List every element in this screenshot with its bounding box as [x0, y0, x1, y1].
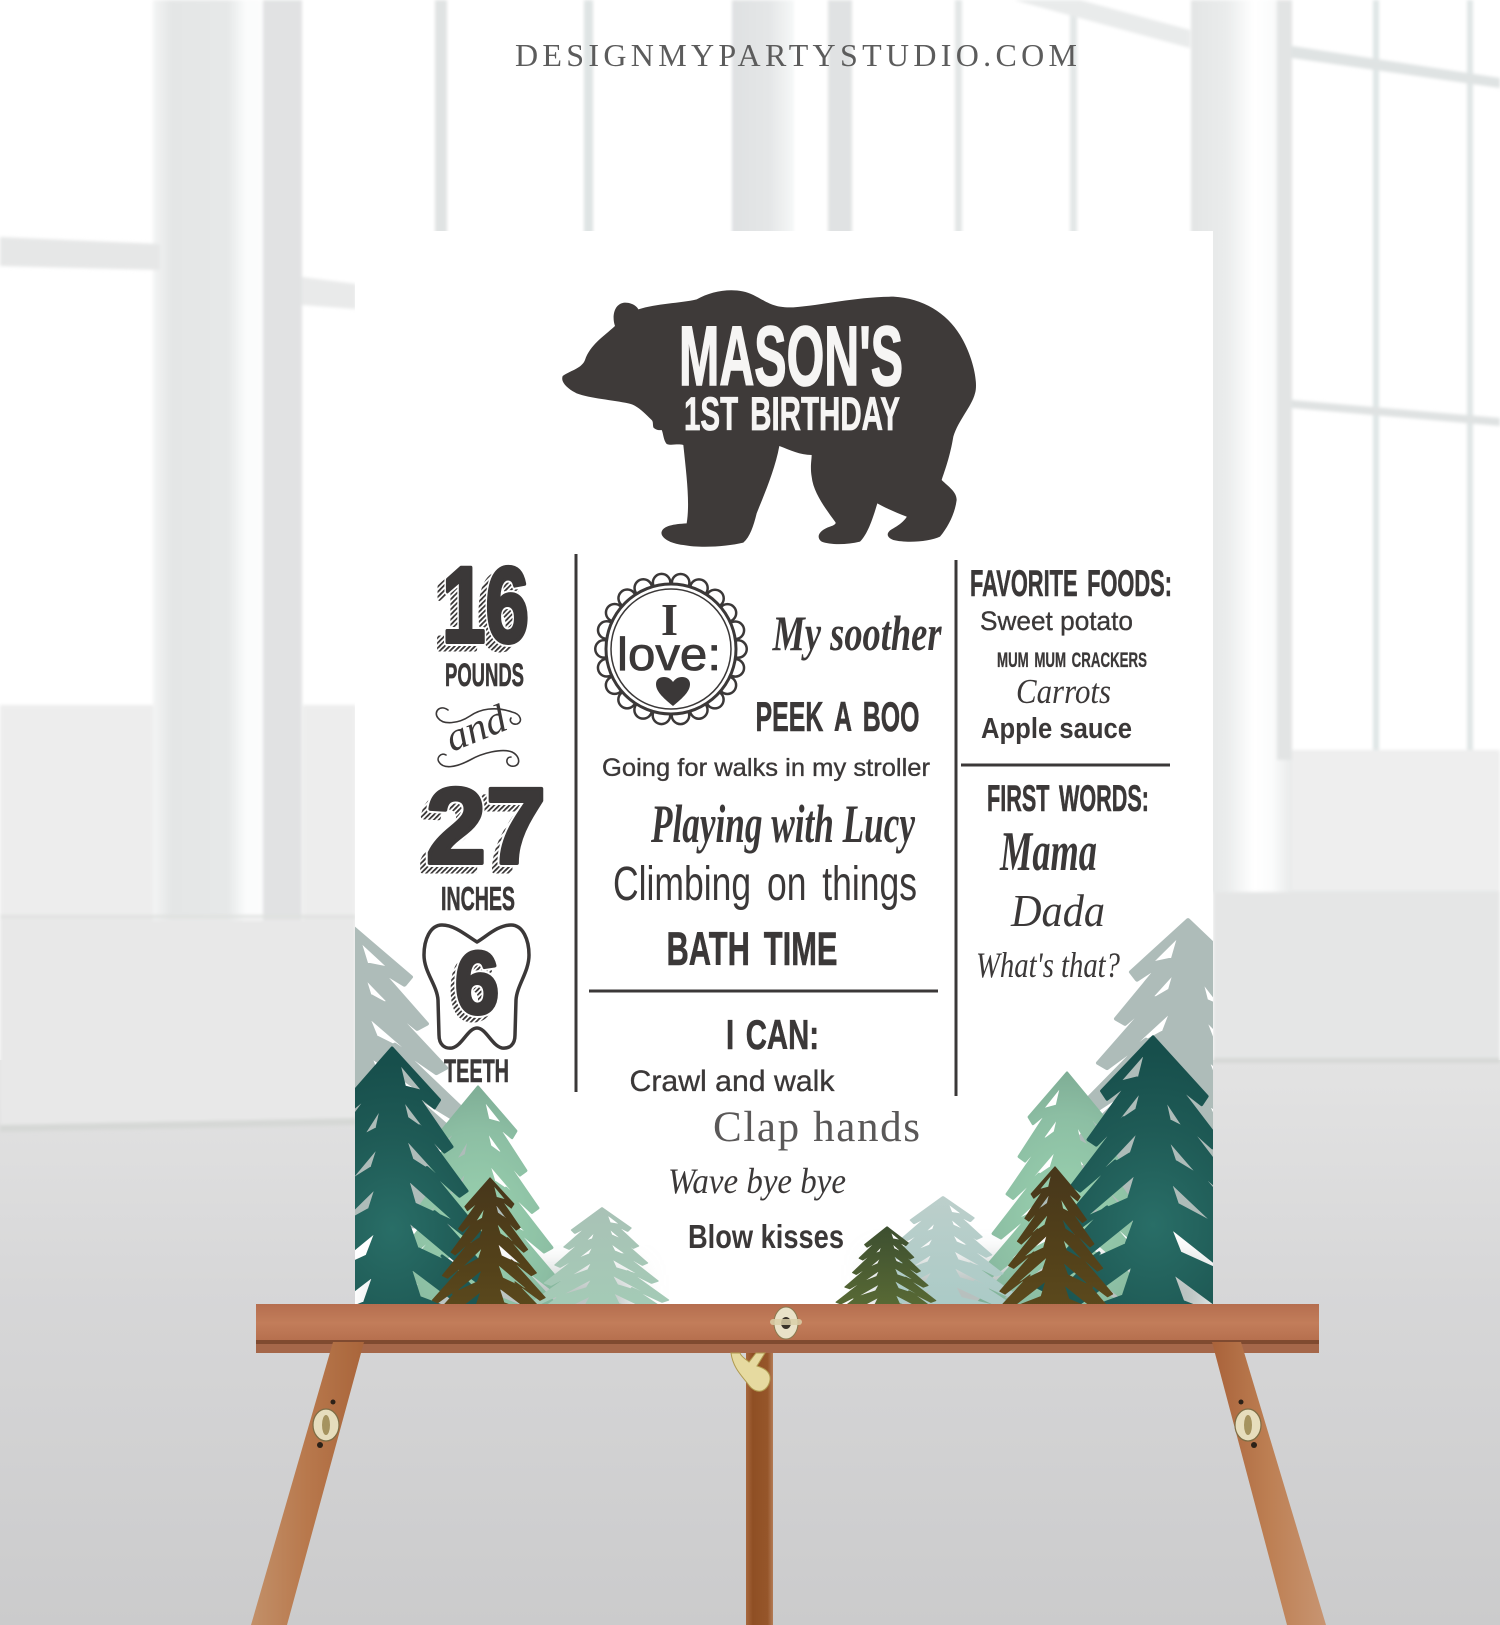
heading: First words: FIRST WORDS:	[987, 778, 1149, 819]
stat: 6 teeth in tooth icon: 6	[450, 939, 494, 1038]
list item: What's that?: What's that?	[976, 945, 1120, 985]
list item: Peek a boo: PEEK A BOO	[756, 693, 920, 740]
divider: centre horizontal rule	[589, 990, 938, 992]
list item: Going for walks in my stroller: Going for walks in my stroller	[602, 754, 930, 782]
tree: small pale blue pine	[874, 1196, 1013, 1304]
list item: My soother: My soother	[772, 605, 942, 661]
badge: I love with heart: love:	[617, 628, 721, 680]
tree: small olive pine	[836, 1226, 936, 1304]
stat: 16 pounds	[434, 544, 529, 693]
tree: left dark teal pine	[355, 1046, 501, 1304]
tree: left brown pine	[432, 1177, 546, 1304]
divider: right horizontal rule	[961, 764, 1170, 766]
stat: 27 inches: 27	[419, 773, 539, 894]
list item: Sweet potato: Sweet potato	[980, 606, 1133, 636]
watermark: DESIGNMYPARTYSTUDIO.COM: DESIGNMYPARTYSTUDIO.COM	[515, 37, 1077, 73]
list item: Apple sauce: Apple sauce	[981, 713, 1132, 745]
stat: 27 inches: 27	[426, 765, 546, 886]
list item: Bath time: BATH TIME	[666, 922, 838, 975]
list item: Climbing on things: Climbing on things	[613, 858, 917, 911]
divider: right vertical rule	[954, 560, 958, 1096]
heading: bear silhouette with name	[562, 290, 976, 547]
heading: I can: I CAN:	[726, 1011, 819, 1058]
stat: 16 pounds: POUNDS	[445, 657, 524, 693]
list item: Blow kisses: Blow kisses	[688, 1218, 844, 1255]
brass wing nut: left leg	[313, 1400, 339, 1448]
icon: bear silhouette	[562, 290, 976, 547]
stat: 6 teeth in tooth icon: 6	[455, 933, 499, 1032]
list item: Wave bye bye: Wave bye bye	[668, 1161, 846, 1201]
list item: Carrots: Carrots	[1016, 672, 1111, 711]
tree: left light green pine	[412, 1085, 560, 1304]
stat: 27 inches: INCHES	[441, 880, 515, 917]
stat: 16 pounds: 16	[442, 544, 529, 665]
badge: I love with heart: I	[661, 594, 678, 645]
easel leg: left	[251, 1342, 364, 1625]
list item: Mama: Mama	[999, 821, 1097, 883]
tree: right brown pine	[999, 1166, 1114, 1304]
stat: 27 inches: 27	[426, 765, 546, 886]
easel ledge	[256, 1304, 1319, 1353]
list item: Mum mum crackers: MUM MUM CRACKERS	[997, 649, 1147, 672]
brass wing nut: right leg	[1235, 1400, 1261, 1448]
panel: milestone sign board	[355, 231, 1213, 1304]
tree: right dark teal pine	[1037, 1035, 1213, 1304]
stat: 6 teeth in tooth icon: TEETH	[444, 1053, 509, 1089]
title: Mason's: MASON'S	[679, 309, 903, 403]
subtitle: 1st Birthday: 1ST BIRTHDAY	[684, 387, 900, 440]
ornament: and with flourishes: and	[439, 695, 514, 760]
stat: 6 teeth in tooth icon	[424, 925, 529, 1089]
divider: left vertical rule	[574, 554, 578, 1092]
badge: I love with heart	[604, 582, 738, 716]
list item: Clap hands: Clap hands	[713, 1104, 920, 1151]
list item: Playing with Lucy: Playing with Lucy	[650, 794, 916, 854]
list item: Dada: Dada	[1010, 885, 1105, 936]
brass hook under ledge	[731, 1353, 770, 1391]
illustration: pine trees along the bottom of the sign	[190, 920, 1338, 1350]
stat: 16 pounds: 16	[434, 551, 521, 672]
column: favorite foods and first words	[961, 563, 1172, 985]
tree: right light green pine	[978, 1071, 1132, 1304]
illustration: wooden easel	[251, 1304, 1326, 1625]
list item: Crawl and walk: Crawl and walk	[630, 1065, 835, 1098]
easel post: centre	[746, 1350, 773, 1625]
brass wing nut: ledge	[770, 1307, 802, 1339]
stat: 16 pounds: 16	[442, 544, 529, 665]
column: I love and I can	[589, 582, 942, 1255]
tree: small pale green pine	[534, 1207, 670, 1304]
stat: 6 teeth in tooth icon: 6	[455, 933, 499, 1032]
easel leg: right	[1212, 1342, 1326, 1625]
heading: Favorite foods: FAVORITE FOODS:	[970, 563, 1172, 604]
tree: left pale gray pine	[355, 926, 506, 1228]
column: body stats	[419, 544, 546, 1089]
tree: right pale gray pine	[1040, 918, 1213, 1222]
